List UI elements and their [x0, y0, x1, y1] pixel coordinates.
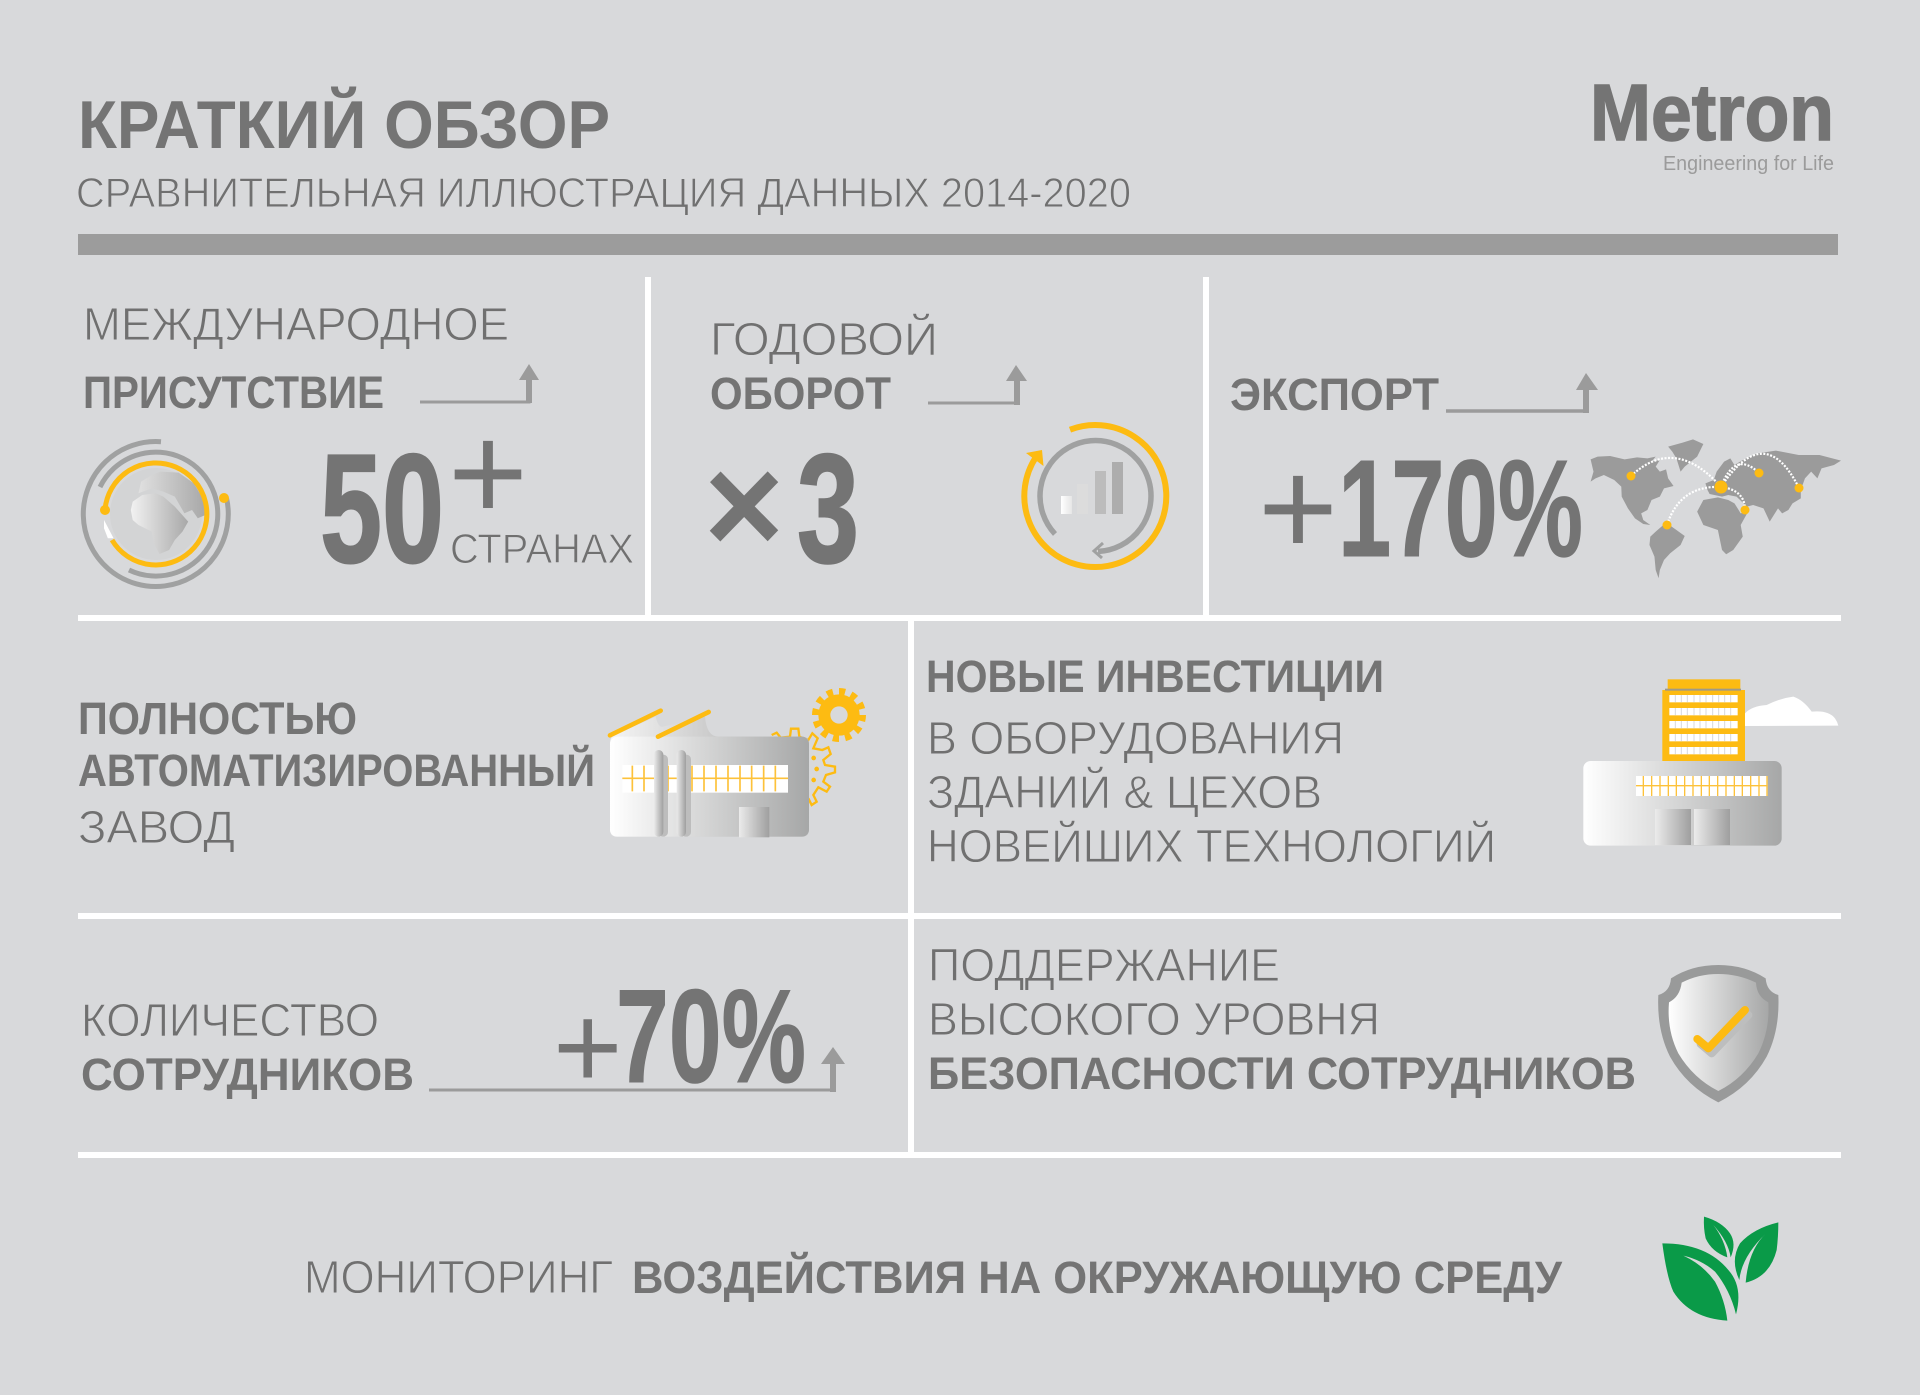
heading: international presence: МЕЖДУНАРОДНОЕ [83, 298, 509, 350]
icon: shield with check [1658, 965, 1779, 1102]
panel: annual turnover [704, 313, 1166, 595]
arrow up [429, 1047, 845, 1092]
number: +170% [1258, 432, 1583, 586]
header [76, 68, 1838, 255]
icon: factory with gears [610, 692, 862, 837]
text block: investment details: В ОБОРУДОВАНИЯ [927, 712, 1344, 764]
number: 50+ countries: 50 [320, 422, 444, 595]
heading: number of employees [81, 994, 414, 1100]
icon: office building with cloud [1583, 679, 1838, 846]
number: +70%: + [553, 981, 622, 1114]
icon: revenue cycle chart [1024, 425, 1166, 567]
arrow up [928, 365, 1027, 405]
text block: employee safety: БЕЗОПАСНОСТИ СОТРУДНИКОВ [928, 1048, 1636, 1099]
text block: investment details [927, 712, 1496, 872]
number: +170%: + [1258, 432, 1338, 585]
heading: fully automated plant: АВТОМАТИЗИРОВАННЫЙ [78, 745, 595, 796]
heading: annual turnover: ОБОРОТ [710, 368, 891, 419]
heading: fully automated plant: ПОЛНОСТЬЮ [78, 693, 357, 744]
number: x3: 3 [797, 422, 859, 595]
number: 50+ countries: + [448, 397, 528, 550]
icon: globe [83, 442, 229, 587]
header bar [78, 234, 1838, 255]
icon: world map with export routes [1591, 439, 1841, 578]
panel: automated plant [78, 692, 862, 853]
panel: number of employees [81, 963, 845, 1114]
panel: environmental monitoring [304, 1217, 1778, 1321]
logo: Metron: Metron [1590, 68, 1834, 157]
text block: employee safety [928, 939, 1636, 1099]
arrow up [1446, 373, 1598, 413]
text block: environmental monitoring: ВОЗДЕЙСТВИЯ НА ОКРУЖАЮЩУЮ СРЕДУ [632, 1252, 1563, 1303]
text block: employee safety: ПОДДЕРЖАНИЕ [928, 939, 1280, 991]
heading: fully automated plant: ЗАВОД [78, 801, 235, 853]
text block: environmental monitoring: МОНИТОРИНГ [304, 1251, 613, 1303]
heading: international presence: ПРИСУТСТВИЕ [83, 367, 384, 418]
heading: international presence [83, 298, 509, 418]
panel: export [1230, 369, 1841, 586]
heading: annual turnover: ГОДОВОЙ [710, 313, 938, 365]
number: x3: × [704, 426, 784, 583]
number: +170%: 170% [1338, 432, 1583, 586]
heading: number of employees: СОТРУДНИКОВ [81, 1049, 414, 1100]
number: 50+ countries [320, 397, 634, 595]
panel: new investments [926, 651, 1838, 872]
number: x3 [704, 422, 859, 595]
heading: fully automated plant [78, 693, 595, 853]
panel: employee safety [928, 939, 1779, 1102]
heading: export: ЭКСПОРТ [1230, 369, 1439, 420]
text block: employee safety: ВЫСОКОГО УРОВНЯ [928, 993, 1380, 1045]
arrow up [420, 364, 539, 403]
number: +70%: 70% [616, 963, 806, 1111]
number: 50+ countries: СТРАНАХ [450, 525, 634, 572]
subtitle: СРАВНИТЕЛЬНАЯ ИЛЛЮСТРАЦИЯ ДАННЫХ 2014-2020 [76, 169, 1131, 216]
heading: annual turnover [710, 313, 938, 419]
text block: investment details: НОВЕЙШИХ ТЕХНОЛОГИЙ [927, 820, 1496, 872]
icon: green leaves [1662, 1217, 1778, 1321]
text block: investment details: ЗДАНИЙ & ЦЕХОВ [927, 766, 1322, 818]
logo: Metron: Engineering for Life [1663, 153, 1834, 175]
number: +70% [553, 963, 806, 1114]
panel: international presence [83, 298, 634, 595]
heading: number of employees: КОЛИЧЕСТВО [81, 994, 379, 1046]
heading: new investments: НОВЫЕ ИНВЕСТИЦИИ [926, 651, 1384, 702]
title: КРАТКИЙ ОБЗОР [78, 86, 610, 163]
